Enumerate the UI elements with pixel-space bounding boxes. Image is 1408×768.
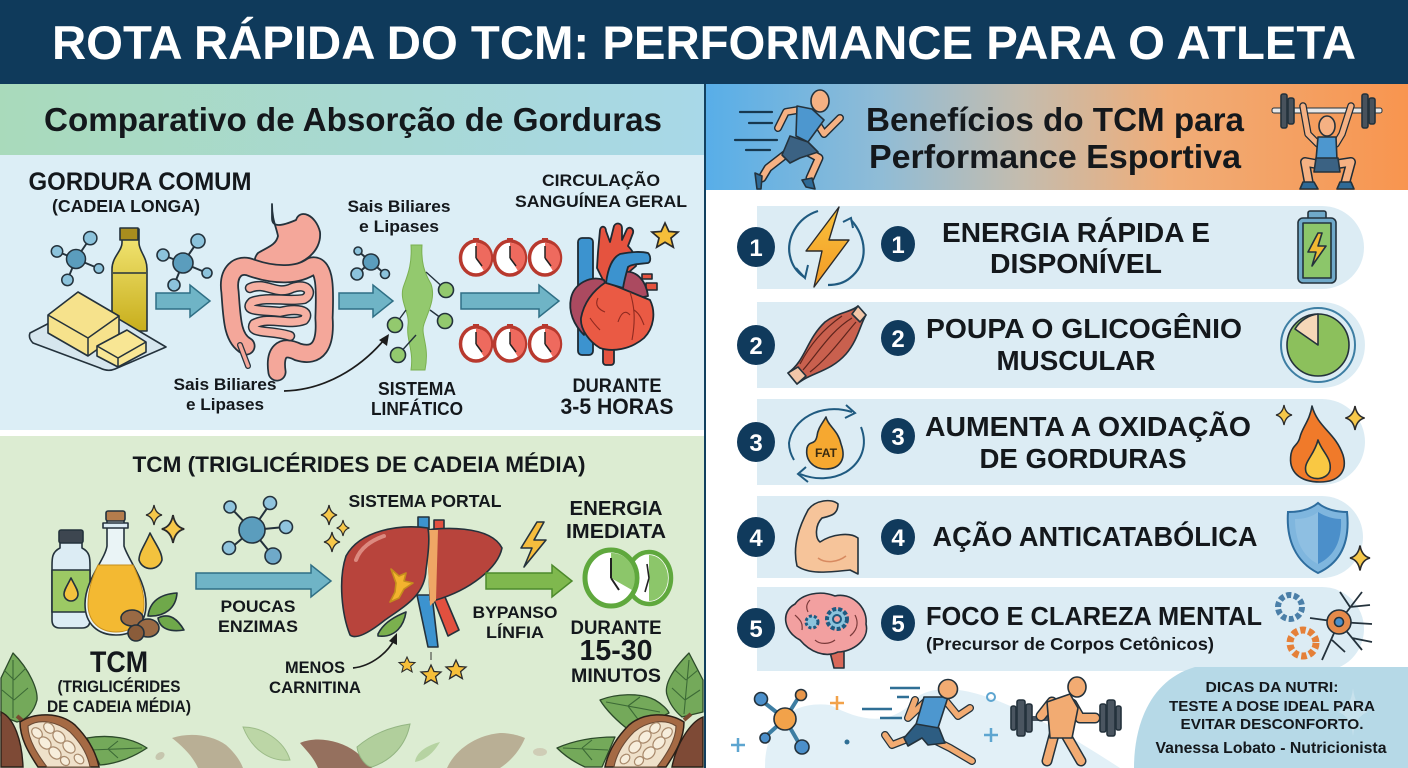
arrow: long blue (196, 565, 331, 597)
benefit 4 (737, 496, 1370, 578)
icon: weightlifter (1272, 94, 1382, 189)
icon: heart (570, 224, 657, 365)
text: (Precursor de Corpos Cetônicos) (926, 634, 1214, 654)
number badge: 1 (749, 235, 763, 262)
panel header: comparativo (0, 84, 704, 155)
panel: dicas da nutri (1134, 667, 1408, 768)
icon: pie gauge (1281, 308, 1355, 382)
icon: clocks row bottom (460, 324, 560, 361)
icon: brain gears (786, 593, 867, 668)
panel: tcm (0, 436, 704, 768)
icon: flexed arm (795, 501, 858, 574)
text: DISPONÍVEL (990, 248, 1162, 279)
label: durante 15-30 minutos: 15-30 (580, 635, 652, 667)
label: sais biliares bottom: Sais Biliares (174, 375, 276, 394)
icon: liver (342, 517, 502, 647)
row background (757, 496, 1363, 578)
icon: lightning cycle (789, 207, 864, 287)
icon: leaves and nuts (121, 593, 184, 641)
tip text (1169, 679, 1375, 733)
row background (757, 302, 1365, 388)
label: sais biliares top: e Lipases (359, 217, 439, 236)
panel header: beneficios (706, 84, 1408, 190)
label: circulacao: CIRCULAÇÃO (542, 170, 660, 190)
heading: gordura comum (28, 168, 252, 216)
label: circulacao: SANGUÍNEA GERAL (515, 192, 687, 211)
panel header: comparativo: Comparativo de Absorção de Gorduras (44, 101, 662, 138)
icon: flame (1276, 405, 1365, 482)
text: DE GORDURAS (980, 443, 1186, 474)
number badge small (881, 418, 915, 454)
text: FOCO E CLAREZA MENTAL (926, 601, 1262, 631)
label: poucas enzimas: POUCAS (220, 597, 296, 616)
icon: gears and neuron (1278, 592, 1372, 660)
number badge small (881, 320, 915, 356)
number badge small (881, 226, 915, 262)
icon: battery (1298, 211, 1336, 283)
number badge small: 2 (891, 326, 905, 353)
benefit 1 (737, 206, 1364, 289)
row background (757, 206, 1364, 289)
row background (757, 587, 1364, 671)
number badge small: 4 (891, 525, 905, 552)
icon: plus and dots (731, 693, 998, 752)
icon: fat burning (789, 405, 864, 482)
number badge small: 5 (891, 611, 905, 638)
label: poucas enzimas: ENZIMAS (218, 617, 298, 636)
icon: clocks row top (460, 238, 560, 275)
heading: gordura comum: GORDURA COMUM (28, 168, 252, 196)
text: POUPA O GLICOGÊNIO (926, 313, 1242, 344)
panel: gordura comum (0, 155, 704, 430)
icon: green clocks (585, 550, 671, 606)
icon: footer molecule (754, 690, 809, 754)
heading (866, 101, 1245, 175)
icon: sparkles tcm (146, 505, 184, 543)
arrow 1 (156, 285, 210, 317)
illustration: faded cocoa pods (154, 724, 547, 768)
icon: oil drop (139, 533, 162, 569)
label: bypanso linfia: BYPANSO (472, 603, 558, 622)
icon: tcm bottles (52, 511, 146, 635)
label: menos carnitina: CARNITINA (269, 678, 361, 697)
number badge (737, 325, 775, 365)
icon: sparkles liver (321, 505, 349, 552)
label: durante 15-30 minutos: MINUTOS (571, 666, 661, 687)
icon: footer runner (862, 680, 972, 761)
arrow 2 (339, 285, 393, 317)
label: bypanso linfia (472, 603, 558, 642)
heading: Performance Esportiva (869, 138, 1242, 175)
text: AUMENTA A OXIDAÇÃO (925, 411, 1251, 442)
icon: lymphatic vessel (388, 245, 454, 370)
label: durante 3-5 horas (560, 376, 674, 419)
icon: shield (1288, 503, 1370, 573)
number badge small: 3 (891, 424, 905, 451)
tip text: DICAS DA NUTRI: (1206, 679, 1338, 696)
number badge (737, 608, 775, 648)
heading: tcm: TCM (TRIGLICÉRIDES DE CADEIA MÉDIA) (132, 452, 586, 477)
text: MUSCULAR (996, 345, 1156, 376)
icon: butter and oil (29, 228, 166, 370)
label: energia imediata (566, 498, 666, 543)
title banner: ROTA RÁPIDA DO TCM: PERFORMANCE PARA O ATLETA (52, 16, 1356, 69)
icon: molecule middle (351, 247, 390, 280)
arrow: green (486, 565, 572, 597)
text: AÇÃO ANTICATABÓLICA (932, 521, 1258, 552)
text (926, 313, 1242, 376)
curved arrow (284, 334, 389, 391)
title banner (0, 0, 1408, 84)
icon: stars (399, 652, 466, 684)
label: tcm (47, 646, 191, 716)
text (942, 217, 1210, 279)
label: durante 3-5 horas: 3-5 HORAS (560, 394, 674, 419)
benefit 3 (737, 399, 1365, 485)
icon: molecule tcm (222, 496, 292, 564)
icon: footer lifter (1011, 677, 1121, 761)
label: durante 15-30 minutos (570, 618, 662, 687)
divider (704, 84, 706, 768)
text: ENERGIA RÁPIDA E (942, 217, 1210, 248)
illustration: cocoa right (557, 653, 703, 767)
label: sais biliares top: Sais Biliares (348, 197, 450, 216)
label: durante 3-5 horas: DURANTE (572, 376, 662, 397)
label: sistema portal: SISTEMA PORTAL (348, 491, 502, 511)
heading: gordura comum: (CADEIA LONGA) (52, 196, 200, 216)
number badge: 2 (749, 333, 763, 360)
curved arrow to liver (353, 633, 397, 668)
icon: star (652, 223, 678, 247)
benefit 2 (737, 302, 1365, 388)
label: sistema linfatico: LINFÁTICO (371, 398, 463, 419)
label: energia imediata: IMEDIATA (566, 521, 666, 543)
label: sais biliares bottom (174, 375, 276, 414)
tip text: TESTE A DOSE IDEAL PARA (1169, 698, 1375, 715)
label: poucas enzimas (218, 597, 298, 636)
icon: runner (735, 90, 840, 189)
illustration: cocoa left (1, 653, 147, 767)
number badge: 5 (749, 616, 763, 643)
number badge small (881, 605, 915, 641)
footer decoration wave (765, 689, 1120, 768)
icon: molecule right (157, 234, 212, 291)
label: tcm: DE CADEIA MÉDIA) (47, 697, 191, 716)
label: menos carnitina (269, 658, 361, 697)
icon: lightning (521, 522, 546, 567)
number badge small: 1 (891, 232, 905, 259)
icon: fat burning: FAT (815, 446, 838, 460)
tip text: EVITAR DESCONFORTO. (1180, 716, 1364, 733)
number badge (737, 517, 775, 557)
text (925, 411, 1251, 474)
icon: muscle (788, 306, 866, 384)
author: Vanessa Lobato - Nutricionista (1156, 740, 1387, 757)
label: durante 15-30 minutos: DURANTE (570, 618, 662, 639)
number badge (737, 227, 775, 267)
number badge: 4 (749, 525, 763, 552)
label: tcm: TCM (90, 646, 148, 679)
label: sistema linfatico: SISTEMA (378, 379, 456, 399)
arrow 3 long (461, 285, 559, 317)
label: energia imediata: ENERGIA (570, 498, 662, 520)
label: circulacao (515, 170, 687, 211)
row background (757, 399, 1365, 485)
icon: molecule left (51, 231, 104, 286)
label: menos carnitina: MENOS (285, 658, 345, 677)
number badge (737, 422, 775, 462)
benefit 5 (737, 587, 1372, 671)
text (926, 601, 1262, 654)
label: sais biliares bottom: e Lipases (186, 395, 264, 414)
icon: digestive tract (230, 204, 325, 372)
number badge small (881, 519, 915, 555)
label: sistema linfatico (371, 379, 463, 419)
number badge: 3 (749, 430, 763, 457)
heading: Benefícios do TCM para (866, 101, 1245, 138)
label: tcm: (TRIGLICÉRIDES (58, 677, 180, 696)
label: sais biliares top (348, 197, 450, 236)
label: bypanso linfia: LÍNFIA (486, 623, 544, 642)
